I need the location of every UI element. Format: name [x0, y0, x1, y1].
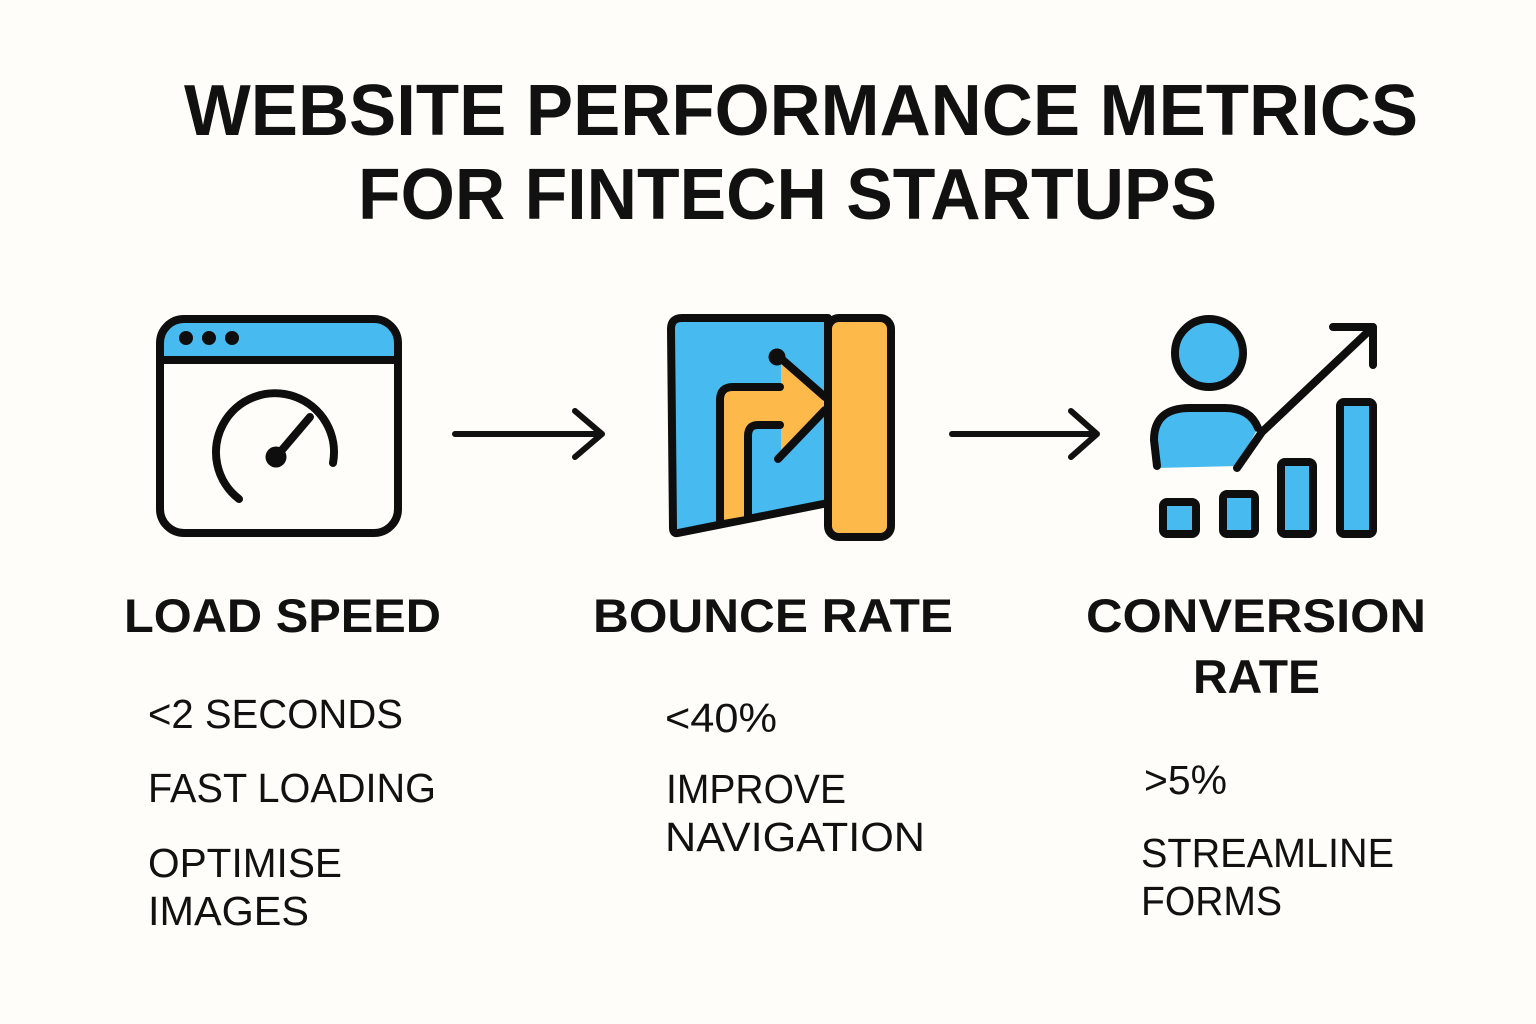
- arrow: bounce rate to conversion rate: [952, 411, 1097, 457]
- heading: conversion rate: CONVERSION: [1086, 589, 1426, 642]
- title: WEBSITE PERFORMANCE METRICS: [184, 71, 1418, 151]
- text: bounce rate details: NAVIGATION: [665, 814, 925, 860]
- text: load speed details: [148, 691, 436, 934]
- icon: browser window with speed gauge: [160, 319, 398, 533]
- heading: load speed: LOAD SPEED: [124, 589, 441, 642]
- text: load speed details: <2 SECONDS: [148, 691, 403, 737]
- text: load speed details: FAST LOADING: [148, 765, 436, 811]
- heading: bounce rate: BOUNCE RATE: [593, 589, 953, 642]
- text: bounce rate details: [665, 695, 925, 860]
- text: conversion rate details: >5%: [1144, 757, 1227, 803]
- text: bounce rate details: <40%: [665, 695, 777, 741]
- icon: door with exit arrow: [671, 318, 891, 537]
- heading: conversion rate: RATE: [1193, 650, 1320, 703]
- icon: person with growth chart: [1154, 319, 1373, 534]
- text: load speed details: IMAGES: [148, 888, 309, 934]
- text: conversion rate details: FORMS: [1141, 878, 1282, 924]
- title: FOR FINTECH STARTUPS: [358, 155, 1217, 235]
- title: [184, 71, 1418, 235]
- arrow: load speed to bounce rate: [455, 411, 602, 457]
- text: conversion rate details: STREAMLINE: [1141, 830, 1394, 876]
- heading: conversion rate: [1086, 589, 1426, 703]
- text: load speed details: OPTIMISE: [148, 840, 342, 886]
- text: bounce rate details: IMPROVE: [666, 766, 846, 812]
- text: conversion rate details: [1141, 757, 1394, 924]
